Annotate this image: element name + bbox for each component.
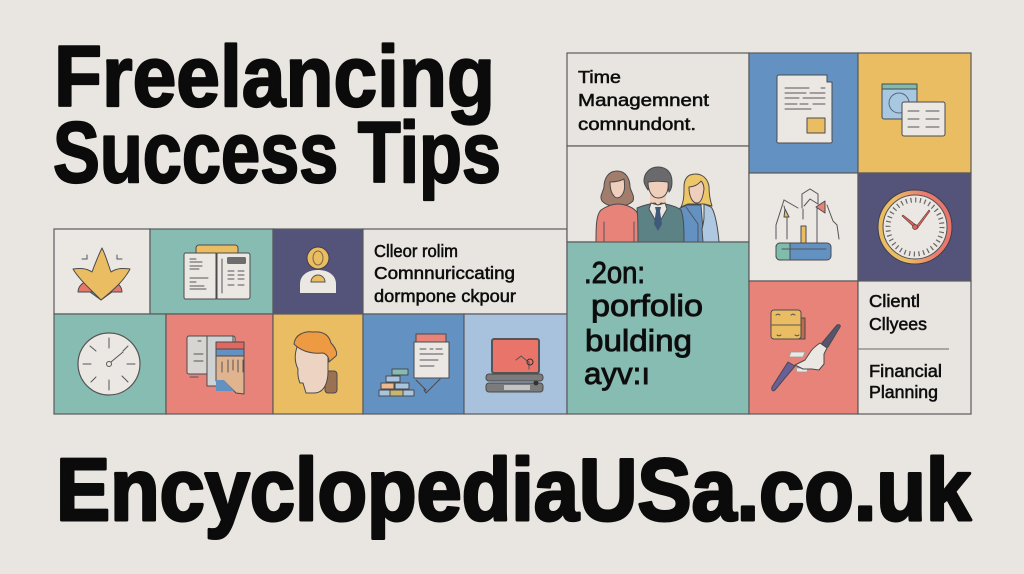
cell: wall clock icon tile	[54, 314, 166, 414]
cell: head portrait icon tile	[273, 314, 363, 414]
text block: portfolio building	[567, 242, 749, 414]
cell: three people illustration	[567, 146, 749, 242]
text block: portfolio building: ayv:ı	[584, 356, 650, 391]
text block: time management: Time	[578, 67, 621, 87]
cell: bricks and note icon tile	[363, 314, 464, 414]
title	[53, 29, 501, 201]
text block: time management: Managemnent	[578, 90, 709, 110]
cell: open book icon tile	[150, 229, 273, 314]
text block: communicating: Comnnuriccating	[374, 263, 515, 283]
panel: left tile grid	[54, 229, 567, 414]
cell: gradient clock icon tile	[858, 173, 971, 281]
text block: client and financial planning: Planning	[869, 382, 938, 402]
text block: client and financial planning: Financial	[869, 361, 942, 381]
text block: communicating: Clleor rolim	[374, 241, 458, 261]
footer website address: EncyclopediaUSa.co.uk	[56, 440, 972, 539]
cell: tools and flags icon tile	[749, 173, 858, 281]
text block: communicating: dormpone ckpour	[374, 286, 516, 306]
text block: client and financial planning: Clientl	[869, 291, 920, 311]
text block: communicating	[363, 229, 567, 314]
person: blonde woman	[680, 174, 719, 242]
text block: portfolio building: .2on:	[584, 255, 645, 290]
cell: document icon tile	[749, 53, 858, 173]
text block: portfolio building: bulding	[585, 323, 692, 358]
panel: right tile grid	[567, 53, 971, 414]
text block: portfolio building: porfolio	[591, 288, 703, 323]
cell: person avatar icon tile	[273, 229, 363, 314]
person: man in suit	[637, 167, 684, 242]
person: woman with brown hair	[596, 171, 642, 242]
cell: browser windows icon tile	[858, 53, 971, 173]
cell: laptop icon tile	[464, 314, 567, 414]
title: Freelancing	[54, 29, 495, 125]
cell: hand with pen icon tile	[749, 281, 858, 414]
cell: documents icon tile	[166, 314, 273, 414]
text block: time management	[567, 53, 749, 146]
text block: time management: comnundont.	[578, 114, 696, 134]
cell: star icon tile	[54, 229, 150, 314]
text block: client and financial planning: Cllyees	[869, 314, 927, 334]
title: Success Tips	[53, 105, 501, 201]
text block: client and financial planning	[858, 281, 971, 414]
